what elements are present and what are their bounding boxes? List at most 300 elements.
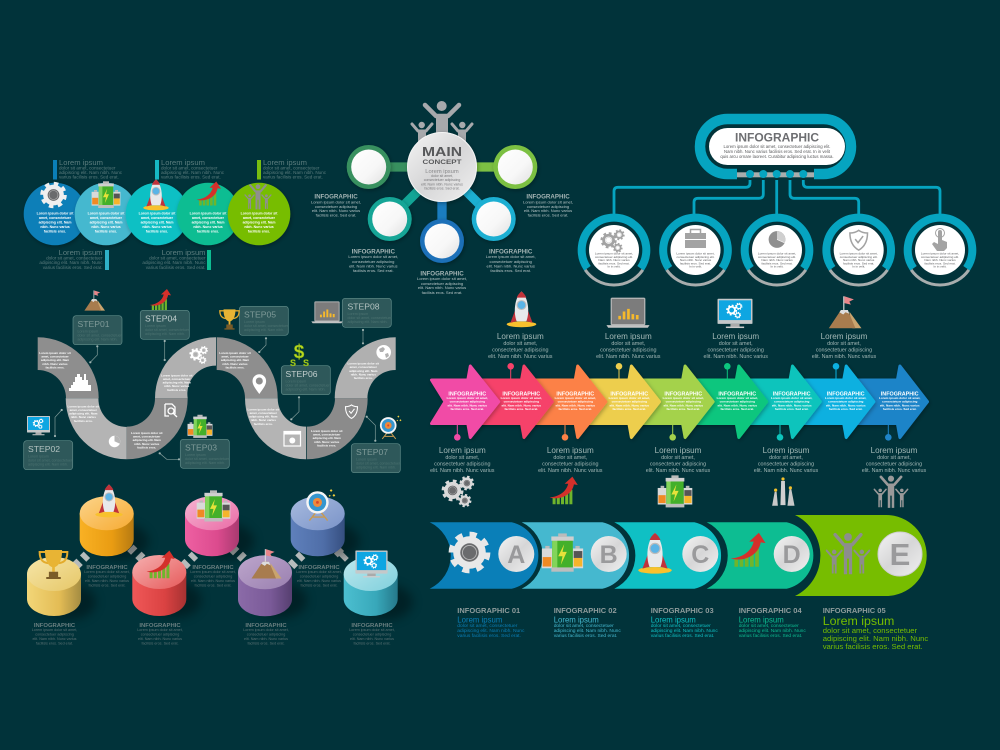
circle 4: growth chart: [177, 182, 239, 245]
connector dashes: [73, 545, 349, 569]
node 4: shield: Nam nibh. Nunc varius: [843, 258, 875, 262]
arrow 6: [683, 366, 767, 438]
text block: lower captions: Lorem ipsum: [763, 446, 810, 455]
text block: upper captions: elit. Nam nibh. Nunc varius: [596, 354, 661, 360]
caption 02: Lorem ipsum: [554, 616, 599, 624]
text block: upper captions: dolor sit amet,: [719, 341, 753, 347]
icon: rocket on cylinder: [95, 484, 123, 517]
node 3: pie: Nam nibh. Nunc varius: [761, 258, 793, 262]
step box 06: [281, 366, 330, 395]
text block: lower cylinder labels: Lorem ipsum dolor sit amet,: [137, 628, 183, 632]
road segment 7: nibh. Nunc varius: [314, 440, 340, 444]
text block: lower captions: varius facilisis eros. Sed erat.: [43, 265, 102, 270]
circle 1: gear: [24, 183, 86, 245]
text block: lower captions: Lorem ipsum: [871, 446, 918, 455]
step box 04: [140, 310, 190, 339]
circle 1: gear: amet, consectetuer: [39, 216, 72, 220]
text block: lower captions: dolor sit amet,: [661, 455, 695, 461]
text block: upper cylinder labels: Lorem ipsum dolor sit amet,: [84, 570, 130, 574]
label: infographic left: consectetuer adipiscing: [315, 204, 357, 209]
hub circle: main concept: Lorem ipsum: [425, 169, 459, 175]
hub circle: main concept: consectetuer adipiscing: [424, 178, 460, 182]
text block: upper cylinder labels: [84, 565, 342, 588]
segment D: [707, 522, 813, 589]
node 3: pie: [745, 218, 809, 285]
icon: dollar step 6: S: [290, 358, 296, 368]
arrow labels: Lorem ipsum dolor sit amet,: [771, 396, 813, 400]
text block: upper captions: varius facilisis eros. Sed erat.: [263, 175, 323, 180]
icon: pie chart: [769, 231, 785, 248]
arrow labels: consectetuer adipiscing: [450, 400, 485, 404]
road segment 3: facilisis eros.: [137, 445, 156, 449]
text block: upper captions: adipiscing elit. Nam nibh. Nunc: [161, 170, 225, 175]
caption 02: dolor sit amet, consectetuer: [554, 623, 614, 629]
text block: upper captions: varius facilisis eros. Sed erat.: [59, 175, 119, 180]
icon: mountain on cylinder: [252, 549, 282, 578]
road segment 1: facilisis eros.: [45, 365, 65, 369]
text block: lower captions: adipiscing elit. Nam nibh. Nunc: [142, 260, 206, 265]
icon: battery: [542, 533, 583, 572]
caption 01: varius facilisis eros. Sed erat.: [457, 633, 521, 639]
node 5: touch: Nam nibh. Nunc varius: [924, 258, 956, 262]
text block: lower cylinder labels: consectetuer adipiscing: [353, 632, 391, 636]
label: infographic lower right: [486, 249, 536, 273]
pins: [454, 363, 892, 441]
icon: gears: [190, 347, 207, 363]
arrow labels: elit. Nam nibh. Nunc varius: [826, 403, 866, 407]
icon: gear: [43, 184, 64, 206]
label: infographic right: Lorem ipsum dolor sit amet,: [523, 200, 573, 204]
step box 05: dolor sit amet, consectetuer: [244, 324, 289, 328]
road segment 5: [217, 337, 278, 398]
text block: upper cylinder labels: facilisis eros. Sed erat.: [88, 584, 126, 588]
text block: lower captions: consectetuer adipiscing: [866, 462, 922, 468]
text block: upper cylinder labels: facilisis eros. Sed erat.: [300, 584, 338, 588]
icon: shield: [850, 230, 868, 250]
icon: monitor step 2: [27, 416, 50, 435]
step box 06: STEP06: [286, 369, 318, 379]
caption 03: dolor sit amet, consectetuer: [651, 623, 711, 629]
circle 4: growth chart: facilisis eros.: [197, 230, 219, 234]
road segment 2: [66, 398, 127, 459]
label: infographic lower right: consectetuer adipiscing: [490, 259, 532, 264]
text block: upper cylinder labels: elit. Nam nibh. Nunc varius: [85, 579, 129, 583]
text block: lower captions: elit. Nam nibh. Nunc varius: [862, 468, 927, 474]
icon: touch hand: [932, 228, 947, 251]
icon: people group: [412, 101, 472, 145]
step box 05: [239, 306, 289, 335]
node 1: gears: facilisis eros. Sed erat.: [598, 261, 630, 265]
node 3: pie: Lorem ipsum dolor sit amet,: [758, 252, 796, 256]
text block: lower cylinder labels: Lorem ipsum dolor sit amet,: [243, 628, 289, 632]
step box 01: [73, 316, 122, 345]
icon: pie: [109, 436, 120, 447]
text block: lower cylinder labels: consectetuer adipiscing: [247, 632, 285, 636]
step box 06: Lorem ipsum: [286, 380, 306, 384]
icon: search document: [165, 404, 177, 417]
caption 05: varius facilisis eros. Sed erat.: [823, 642, 923, 651]
text block: lower captions: consectetuer adipiscing: [758, 462, 814, 468]
label: infographic lower left: consectetuer adipiscing: [352, 259, 394, 264]
arrow labels: INFOGRAPHIC: [773, 392, 811, 398]
arrow labels: consectetuer adipiscing: [504, 400, 539, 404]
text block: lower captions: Lorem ipsum: [162, 248, 206, 257]
step box 06: dolor sit amet, consectetuer: [286, 384, 330, 388]
arrow labels: Lorem ipsum dolor sit amet,: [609, 396, 650, 400]
step box 02: STEP02: [28, 444, 60, 454]
text block: lower captions: [39, 248, 211, 270]
text block: lower cylinder labels: consectetuer adipiscing: [141, 632, 179, 636]
arrow labels: elit. Nam nibh. Nunc varius: [555, 403, 595, 407]
cylinder purple: [238, 555, 307, 618]
text block: lower captions: dolor sit amet,: [877, 455, 911, 461]
icon: dollar step 6: $: [294, 342, 305, 363]
road segment 4: amet, consectetuer: [163, 377, 191, 381]
circle 1: gear: Lorem ipsum dolor sit: [37, 212, 74, 216]
road segment 3: adipiscing elit. Nam: [133, 438, 161, 442]
segment C: [614, 522, 721, 589]
header pill: Nam nibh. Nunc varius facilisis eros. Sed erat. In in velit: [724, 149, 831, 154]
road segment 5: facilisis eros.: [225, 365, 245, 369]
road segment 7: [307, 398, 368, 459]
step box 03: adipiscing elit. Nam nibh.: [185, 461, 225, 465]
text block: lower captions: elit. Nam nibh. Nunc varius: [538, 468, 603, 474]
text block: lower captions: Lorem ipsum: [655, 446, 702, 455]
header pill: Lorem ipsum dolor sit amet, consectetuer adipiscing elit.: [724, 144, 830, 149]
icon: laptop step 8: [311, 302, 343, 323]
petal: cyan: [472, 197, 516, 241]
icon: growth chart: [197, 182, 221, 205]
arrow 8: [790, 366, 874, 438]
caption 01: dolor sit amet, consectetuer: [457, 623, 518, 629]
text block: lower captions: consectetuer adipiscing: [434, 462, 490, 468]
node 3: pie: In in velit.: [770, 265, 784, 269]
road segment 1: Lorem ipsum dolor sit: [39, 351, 71, 355]
node 1: gears: [582, 218, 646, 285]
road segment 6: amet, consectetuer: [250, 411, 278, 415]
text block: lower captions: consectetuer adipiscing: [542, 462, 598, 468]
caption 04: varius facilisis eros. Sed erat.: [739, 633, 802, 639]
segment D: D: [783, 541, 801, 569]
text block: lower cylinder labels: INFOGRAPHIC: [34, 623, 76, 629]
circle 5: people: Lorem ipsum dolor sit: [241, 212, 278, 216]
arrow labels: elit. Nam nibh. Nunc varius: [663, 403, 703, 407]
text block: lower captions: elit. Nam nibh. Nunc varius: [430, 468, 495, 474]
step box 03: Lorem ipsum: [185, 453, 206, 457]
label: infographic lower left: INFOGRAPHIC: [352, 249, 395, 256]
arrow labels: INFOGRAPHIC: [881, 392, 919, 398]
text block: lower cylinder labels: elit. Nam nibh. Nunc varius: [32, 637, 77, 641]
step box 05: STEP05: [244, 310, 276, 320]
icon: trophy on cylinder: [40, 550, 67, 579]
road segment 6: Lorem ipsum dolor sit: [248, 407, 279, 411]
circle 3: rocket: [126, 179, 188, 245]
road segment 7: Lorem ipsum dolor sit: [311, 429, 342, 433]
text block: lower cylinder labels: consectetuer adipiscing: [35, 632, 74, 636]
road segment 6: facilisis eros.: [254, 422, 273, 426]
caption 04: INFOGRAPHIC 04: [739, 606, 802, 615]
circle 5: people: amet, consectetuer: [243, 216, 276, 220]
road segment 6: [245, 398, 306, 459]
icon: gear: [452, 535, 487, 570]
road segment 6: nibh. Nunc varius: [251, 418, 276, 422]
cylinder orange: [80, 496, 149, 559]
icon: towers above D: [772, 477, 795, 506]
road segment 2: facilisis eros.: [74, 419, 93, 423]
road segment 4: facilisis eros.: [167, 388, 186, 392]
road segment 1: amet, consectetuer: [41, 355, 69, 359]
hub circle: main concept: dolor sit amet,: [431, 174, 453, 178]
arrow labels: Lorem ipsum dolor sit amet,: [825, 396, 867, 400]
icon: monitor: [718, 299, 752, 328]
text block: lower captions: Lorem ipsum: [439, 446, 486, 455]
text block: upper captions: adipiscing elit. Nam nibh. Nunc: [263, 170, 327, 175]
label: infographic lower right: Lorem ipsum dolor sit amet,: [486, 254, 536, 259]
step box 08: STEP08: [348, 302, 380, 312]
label: infographic right: consectetuer adipiscing: [527, 204, 569, 209]
text block: upper cylinder labels: elit. Nam nibh. Nunc varius: [297, 579, 341, 583]
circle 2: battery: amet, consectetuer: [90, 216, 123, 220]
icon: mountain: [829, 296, 861, 328]
arrow labels: facilisis eros. Sed erat.: [613, 407, 646, 411]
caption 03: adipiscing elit. Nam nibh. Nunc: [651, 628, 718, 634]
circle 3: rocket: adipiscing elit. Nam: [141, 220, 173, 224]
text block: upper captions: [53, 158, 327, 180]
road segment 2: Lorem ipsum dolor sit: [68, 404, 99, 408]
road segment 5: Lorem ipsum dolor sit: [219, 351, 251, 355]
text block: lower captions: Lorem ipsum: [547, 446, 594, 455]
arrow labels: elit. Nam nibh. Nunc varius: [880, 403, 920, 407]
text block: upper cylinder labels: Lorem ipsum dolor sit amet,: [296, 570, 342, 574]
text block: upper cylinder labels: elit. Nam nibh. Nunc varius: [191, 579, 235, 583]
text block: upper cylinder labels: INFOGRAPHIC: [86, 565, 128, 571]
caption 04: [739, 606, 806, 639]
road segment 4: nibh. Nunc varius: [164, 384, 190, 388]
cylinder cyan: [344, 557, 413, 620]
arrow labels: INFOGRAPHIC: [610, 392, 648, 398]
road segment 7: adipiscing elit. Nam: [313, 436, 341, 440]
node 4: shield: [826, 218, 891, 285]
arrow labels: Lorem ipsum dolor sit amet,: [447, 396, 488, 400]
caption 04: dolor sit amet, consectetuer: [739, 623, 799, 629]
caption 02: varius facilisis eros. Sed erat.: [554, 633, 617, 639]
icon: people: [245, 184, 271, 209]
panel: arrow chain: [430, 291, 928, 474]
icon: globe: [376, 345, 391, 360]
caption 01: Lorem ipsum: [457, 616, 502, 624]
road segment 3: nibh. Nunc varius: [134, 442, 160, 446]
circle 3: rocket: nibh. Nunc varius: [142, 225, 172, 229]
road segment 8: [335, 337, 396, 398]
arrow labels: INFOGRAPHIC: [827, 392, 865, 398]
hub circle: main concept: [408, 132, 476, 202]
icon: gears above A: [444, 477, 473, 506]
road segment 5: amet, consectetuer: [221, 355, 249, 359]
text block: upper cylinder labels: Lorem ipsum dolor sit amet,: [190, 570, 236, 574]
icon: rocket: [507, 291, 536, 327]
label: infographic left: INFOGRAPHIC: [314, 193, 358, 200]
label: infographic left: [311, 193, 361, 218]
node 4: shield: In in velit.: [852, 265, 865, 269]
step box 08: [342, 298, 392, 327]
leader lines: [54, 329, 376, 460]
node 1: gears: In in velit.: [607, 265, 621, 269]
text block: lower cylinder labels: elit. Nam nibh. Nunc varius: [138, 637, 182, 641]
icon: bar chart: [69, 374, 91, 391]
connector lines: [614, 174, 940, 218]
text block: upper captions: Lorem ipsum: [821, 332, 868, 341]
caption 04: Lorem ipsum: [739, 616, 784, 624]
caption 02: adipiscing elit. Nam nibh. Nunc: [554, 628, 621, 634]
petal: lime: [493, 145, 537, 189]
arrow labels: elit. Nam nibh. Nunc varius: [501, 403, 541, 407]
text block: lower cylinder labels: elit. Nam nibh. Nunc varius: [350, 637, 394, 641]
text block: lower captions: dolor sit amet,: [769, 455, 803, 461]
node 5: touch: [908, 218, 972, 285]
step box 07: adipiscing elit. Nam nibh.: [356, 466, 396, 470]
text block: lower cylinder labels: Lorem ipsum dolor sit amet,: [349, 628, 395, 632]
caption 03: INFOGRAPHIC 03: [651, 606, 714, 615]
cylinder yellow: [27, 557, 96, 620]
arrow labels: Lorem ipsum dolor sit amet,: [879, 396, 921, 400]
circle 5: people: nibh. Nunc varius: [244, 225, 274, 229]
text block: upper captions: dolor sit amet, consectetuer: [59, 166, 116, 171]
circle 5: people: adipiscing elit. Nam: [243, 220, 275, 224]
caption 03: [651, 606, 718, 639]
panel: five overlapping circles: [24, 158, 327, 270]
segment A: A: [507, 541, 525, 569]
icon: monitor on cylinder: [355, 550, 388, 577]
arrow labels: Lorem ipsum dolor sit amet,: [555, 396, 596, 400]
segment E: [795, 515, 927, 596]
road segment 1: adipiscing elit. Nam: [41, 358, 69, 362]
icon: target step 7: [380, 416, 401, 439]
step box 03: dolor sit amet, consectetuer: [185, 457, 230, 461]
caption 04: adipiscing elit. Nam nibh. Nunc: [739, 628, 806, 634]
step box 04: adipiscing elit. Nam nibh.: [145, 332, 185, 336]
arrow labels: consectetuer adipiscing: [774, 400, 810, 404]
caption 05: Lorem ipsum: [823, 614, 894, 628]
step box 07: [351, 444, 401, 473]
icon: dollar step 6: S: [303, 358, 309, 368]
label: infographic lower right: INFOGRAPHIC: [489, 249, 533, 256]
text block: upper cylinder labels: consectetuer adipiscing: [194, 574, 232, 578]
icon: chart above B: [550, 477, 578, 504]
icon: chart: [731, 533, 766, 567]
header pill: quis arcu ornare laoreet. Curabitur adipiscing luctus massa.: [720, 154, 834, 159]
text block: upper captions: elit. Nam nibh. Nunc varius: [488, 354, 553, 360]
hub circle: main concept: facilisis eros. Sed erat.: [424, 187, 460, 191]
arrow 3: [521, 366, 606, 438]
road segment 6: adipiscing elit. Nam: [249, 415, 278, 419]
label: infographic bottom: INFOGRAPHIC: [420, 271, 464, 278]
segment E: E: [890, 537, 910, 572]
icon: shield: [346, 405, 358, 418]
road segment 1: nibh. Nunc varius: [42, 362, 68, 366]
step box 01: Lorem ipsum: [78, 330, 98, 334]
node 2: briefcase: facilisis eros. Sed erat.: [680, 261, 711, 265]
caption 03: varius facilisis eros. Sed erat.: [651, 633, 714, 639]
arrow 1: [432, 366, 499, 438]
caption 05: dolor sit amet, consectetuer: [823, 626, 918, 635]
text block: lower cylinder labels: facilisis eros. Sed erat.: [36, 642, 73, 646]
caption 01: adipiscing elit. Nam nibh. Nunc: [457, 628, 525, 634]
label: infographic lower left: Lorem ipsum dolor sit amet,: [348, 254, 398, 259]
arrow labels: consectetuer adipiscing: [558, 400, 593, 404]
node 3: pie: facilisis eros. Sed erat.: [761, 261, 793, 265]
step box 04: dolor sit amet, consectetuer: [145, 328, 190, 332]
arrow 7: [736, 366, 820, 438]
step box 07: STEP07: [356, 447, 388, 457]
road segment 7: amet, consectetuer: [313, 433, 341, 437]
text block: lower captions: elit. Nam nibh. Nunc varius: [646, 468, 711, 474]
node 2: briefcase: Nam nibh. Nunc varius: [680, 258, 712, 262]
icon: rocket: [143, 179, 169, 210]
step box 02: dolor sit amet, consectetuer: [28, 458, 73, 462]
icon: bill window: [284, 432, 300, 446]
label: infographic left: facilisis eros. Sed erat.: [316, 213, 356, 218]
road segment 2: nibh. Nunc varius: [71, 415, 96, 419]
road segment 4: [155, 337, 216, 398]
text block: upper cylinder labels: facilisis eros. Sed erat.: [194, 584, 232, 588]
circle 4: growth chart: adipiscing elit. Nam: [192, 220, 224, 224]
text block: upper captions: consectetuer adipiscing: [816, 348, 872, 354]
step box 08: adipiscing elit. Nam nibh.: [348, 320, 387, 324]
text block: upper captions: elit. Nam nibh. Nunc varius: [812, 354, 877, 360]
text block: lower cylinder labels: facilisis eros. Sed erat.: [141, 642, 179, 646]
icon: trophy step 5: [220, 309, 239, 330]
caption 01: [457, 606, 525, 639]
panel: main concept hub: [311, 101, 573, 295]
text block: upper captions: dolor sit amet, consectetuer: [161, 166, 218, 171]
icon: laptop: [606, 298, 650, 328]
step box 08: dolor sit amet, consectetuer: [348, 316, 392, 320]
node 1: gears: Nam nibh. Nunc varius: [598, 258, 630, 262]
text block: upper captions: adipiscing elit. Nam nibh. Nunc: [59, 170, 123, 175]
arrow labels: INFOGRAPHIC: [718, 392, 756, 398]
road segment 8: Lorem ipsum dolor sit: [348, 362, 379, 366]
arrow labels: consectetuer adipiscing: [882, 400, 918, 404]
text block: upper captions: dolor sit amet, consectetuer: [263, 166, 320, 171]
text block: upper captions: consectetuer adipiscing: [708, 348, 764, 354]
panel: serpentine road steps: [24, 289, 401, 473]
road segment 8: nibh. Nunc varius: [351, 372, 376, 376]
text block: lower captions: consectetuer adipiscing: [650, 462, 706, 468]
icon: battery on cylinder: [197, 490, 230, 522]
text block: lower cylinder labels: INFOGRAPHIC: [139, 623, 181, 629]
road segment 7: facilisis eros.: [317, 443, 336, 447]
arrow labels: elit. Nam nibh. Nunc varius: [447, 403, 487, 407]
icon: people: [827, 533, 869, 574]
panel: cylinders: [27, 484, 413, 646]
arrow labels: facilisis eros. Sed erat.: [559, 407, 592, 411]
arrow labels: Lorem ipsum dolor sit amet,: [663, 396, 704, 400]
arrow labels: [447, 392, 921, 411]
petal: blue: [420, 219, 464, 263]
step box 01: dolor sit amet, consectetuer: [78, 334, 122, 338]
arrow 2: [467, 366, 552, 438]
arrow labels: consectetuer adipiscing: [612, 400, 647, 404]
icon: battery: [92, 181, 120, 208]
circle 2: battery: facilisis eros.: [95, 230, 117, 234]
step box 01: STEP01: [78, 319, 110, 329]
road segment 2: amet, consectetuer: [70, 408, 98, 412]
arrow labels: consectetuer adipiscing: [666, 400, 701, 404]
road segment 8: facilisis eros.: [354, 376, 373, 380]
label: infographic left: elit. Nam nibh. Nunc varius: [312, 208, 360, 213]
arrow labels: consectetuer adipiscing: [720, 400, 755, 404]
circle 4: growth chart: amet, consectetuer: [192, 216, 225, 220]
